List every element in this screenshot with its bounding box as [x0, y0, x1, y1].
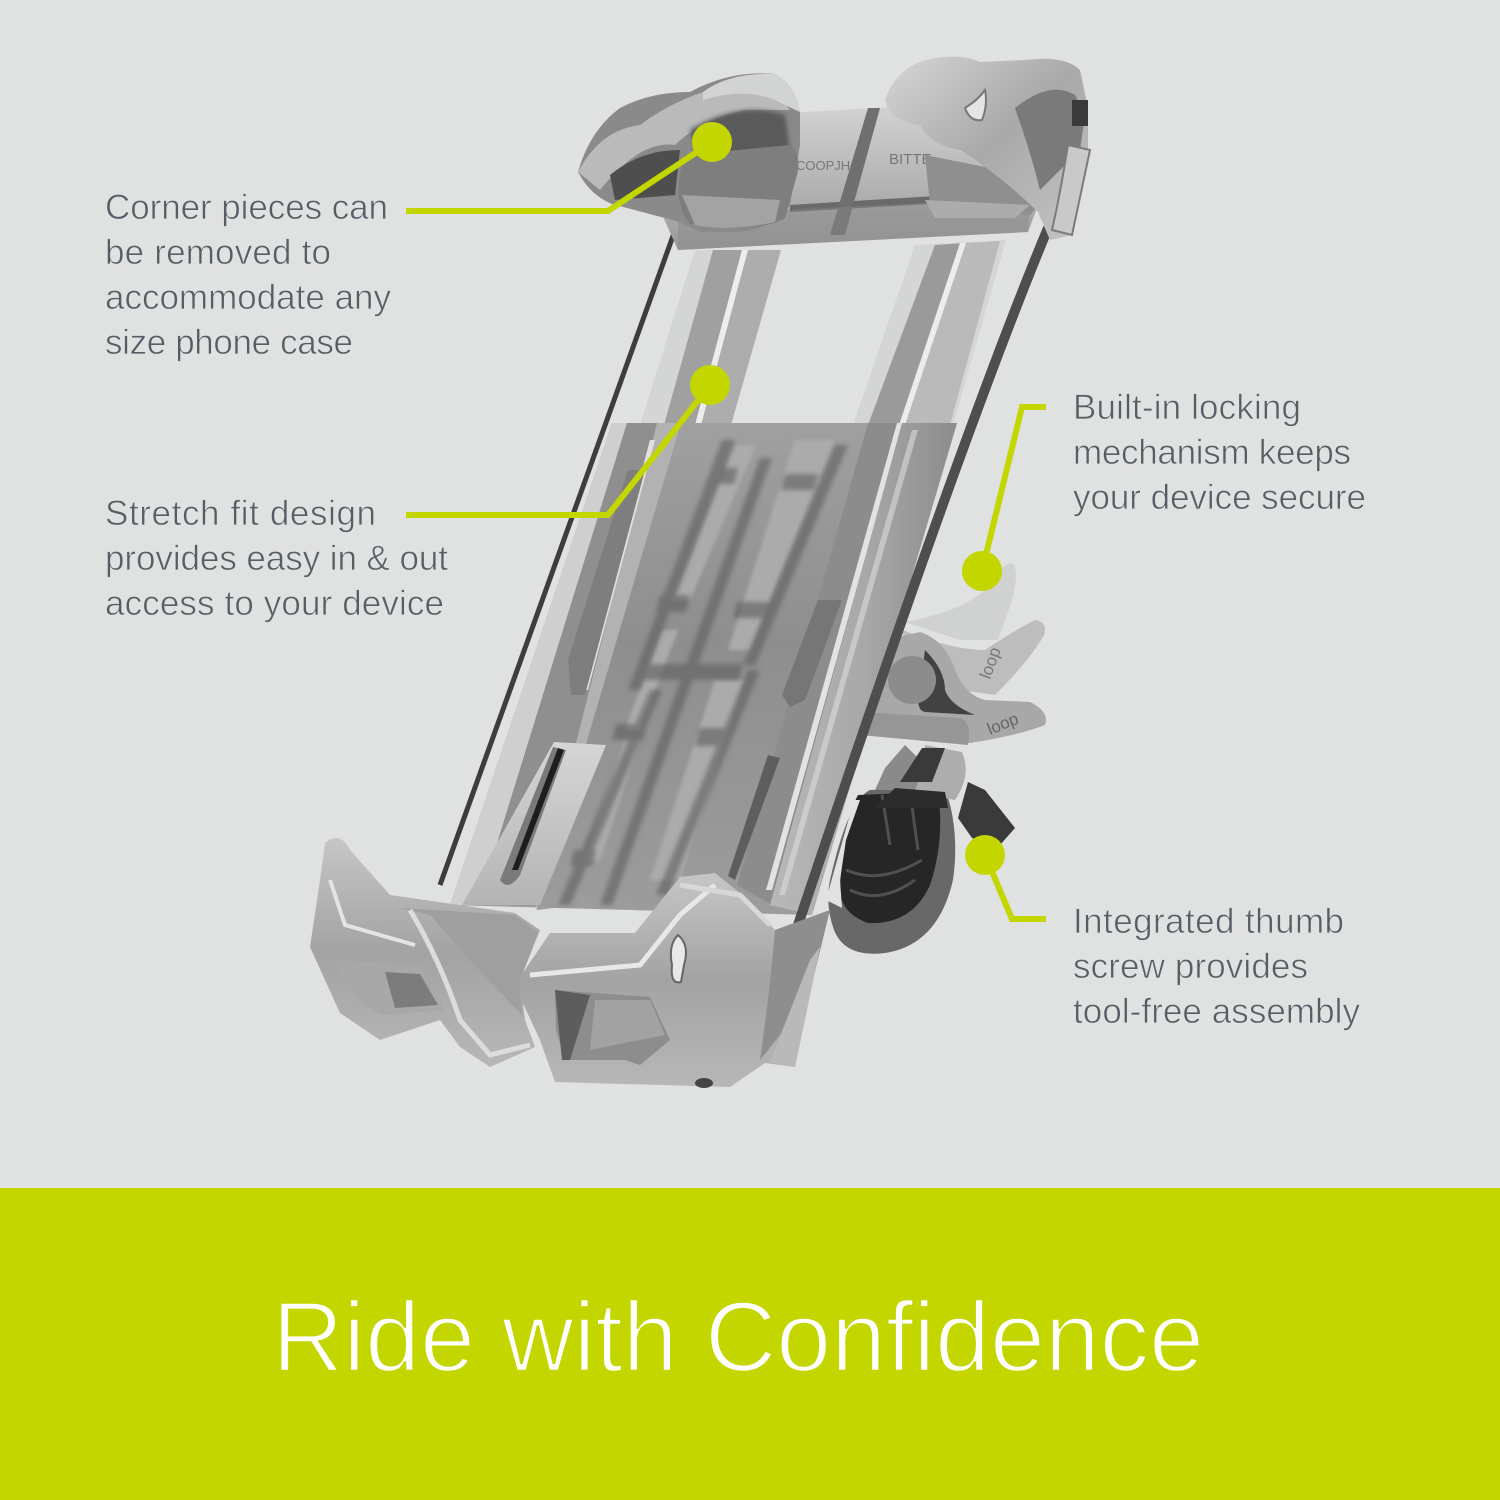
locking wings: loop [984, 709, 1021, 739]
right gap strip [737, 423, 902, 905]
locking wings [860, 563, 1046, 745]
text: locking mechanism [1073, 388, 1366, 517]
text: thumb screw: tool-free assembly [1073, 992, 1360, 1031]
right slot [728, 755, 780, 880]
right pad [782, 600, 842, 707]
text: locking mechanism: mechanism keeps [1073, 433, 1351, 472]
text: stretch fit: Stretch fit design [105, 494, 376, 533]
text: thumb screw: Integrated thumb [1073, 902, 1344, 941]
text: corner pieces [105, 188, 392, 362]
text: corner pieces: accommodate any [105, 278, 392, 317]
top bar: BITTE [889, 151, 932, 168]
text: stretch fit: access to your device [105, 584, 444, 623]
callout: locking mechanism leader [962, 407, 1046, 591]
text: stretch fit: provides easy in & out [105, 539, 448, 578]
text: thumb screw: screw provides [1073, 947, 1308, 986]
callout: stretch fit leader [406, 365, 730, 515]
text: locking mechanism: your device secure [1073, 478, 1366, 517]
left rail upper section [640, 250, 781, 425]
outer left light strip [450, 423, 627, 905]
left pad [568, 470, 645, 695]
top right corner piece [885, 56, 1090, 240]
text: corner pieces: Corner pieces can [105, 188, 388, 227]
left elastic cord [440, 222, 678, 885]
right rail upper section [853, 240, 1006, 425]
text: locking mechanism: Built-in locking [1073, 388, 1301, 427]
lower left rail with slot [462, 742, 606, 905]
top left corner piece [578, 73, 800, 232]
left dark strip [478, 423, 657, 905]
lower panel [450, 423, 957, 915]
left mid strip [535, 423, 681, 910]
title: Ride with Confidence [272, 1281, 1204, 1392]
locking wings: loop [976, 645, 1005, 681]
centre light bars [585, 440, 835, 880]
handlebar clamp [826, 745, 966, 954]
text: stretch fit [105, 494, 448, 623]
phone mount product illustration [310, 56, 1090, 1088]
right elastic cord [798, 228, 1048, 925]
centre panel [537, 423, 868, 910]
top bar [660, 107, 1040, 250]
thumb screw [958, 782, 1015, 845]
text: corner pieces: size phone case [105, 323, 353, 362]
background [0, 0, 1500, 1188]
bottom left corner piece [310, 838, 540, 1067]
bottom right corner piece [520, 873, 830, 1088]
callout: corner pieces leader [406, 122, 732, 211]
text: thumb screw [1073, 902, 1360, 1031]
callout: thumb screw leader [965, 835, 1046, 919]
outer right strip [770, 423, 957, 915]
centre dark pattern [558, 440, 848, 905]
banner [0, 1188, 1500, 1500]
top bar: COOPJH [796, 158, 850, 173]
text: corner pieces: be removed to [105, 233, 331, 272]
